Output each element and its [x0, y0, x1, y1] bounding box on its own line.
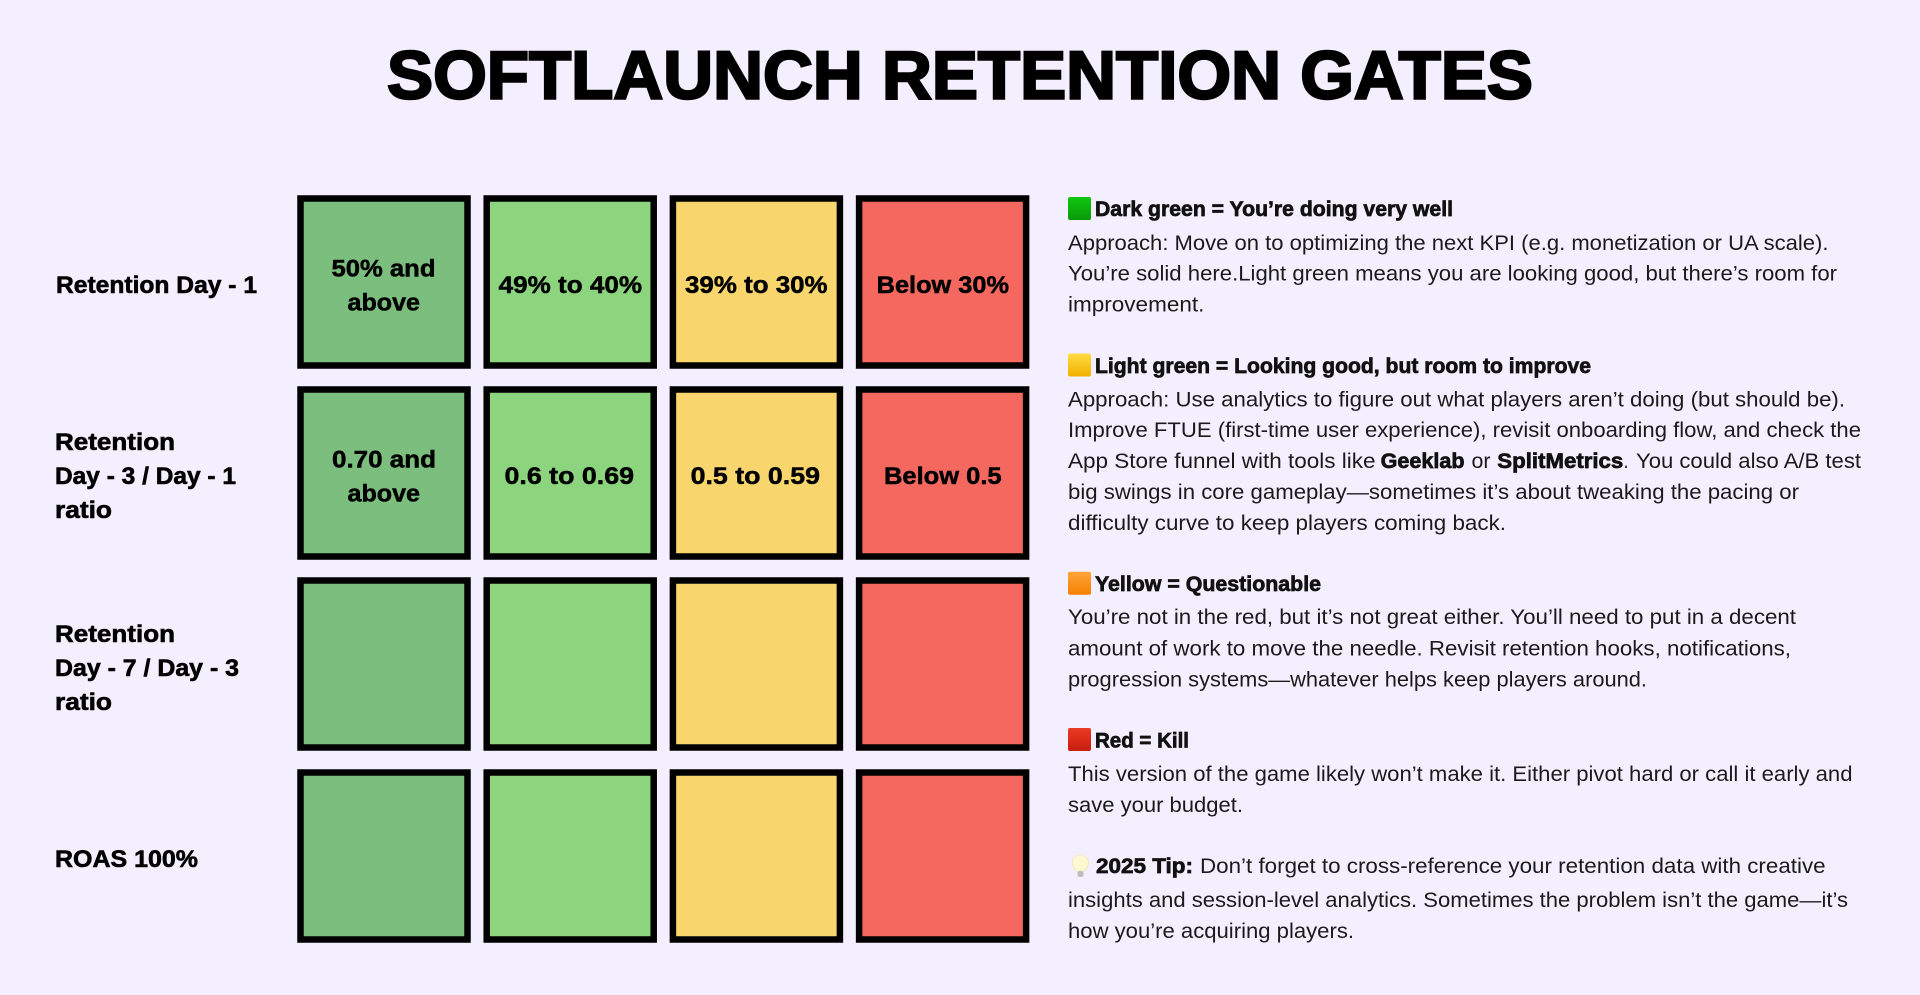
heading: dark green: Dark green = You’re doing very well	[1095, 197, 1453, 221]
row 3 cells	[300, 580, 1026, 748]
heading: light green: Light green = Looking good, but room to improve	[1095, 354, 1591, 378]
text: light green approach: .	[1624, 449, 1628, 473]
text: red description: save your budget.	[1068, 793, 1243, 817]
row 4 cells	[300, 772, 1026, 940]
cell: Below 0.5	[859, 390, 1026, 556]
text: light green approach: Geeklab	[1381, 449, 1465, 473]
text: light green approach: SplitMetrics	[1497, 449, 1623, 473]
cell: 0.70 and above	[300, 390, 468, 556]
retention grid	[55, 198, 1026, 940]
cell: 0.5 to 0.59	[673, 390, 840, 556]
text: tip: insights and session-level analytics. Sometimes the problem isn’t the game—it’s	[1068, 888, 1848, 912]
text: light green approach: or	[1472, 449, 1490, 473]
legend: red	[1068, 728, 1852, 817]
icon: red square	[1068, 728, 1091, 751]
icon: green square	[1068, 197, 1091, 220]
heading: yellow: Yellow = Questionable	[1095, 572, 1321, 596]
cell: 49% to 40%	[487, 198, 654, 366]
text: light green approach: difficulty curve to keep players coming back.	[1068, 511, 1506, 535]
text: yellow description	[1068, 605, 1796, 692]
row label: Day 3 / Day 1 ratio: Day - 3 / Day - 1	[55, 463, 236, 490]
text: dark green approach: You’re solid here.Light green means you are looking good, but there’s room for	[1068, 262, 1837, 286]
text: light green approach: You could also A/B test	[1636, 449, 1861, 473]
row 2 cells	[300, 390, 1026, 556]
cell: Below 30%	[859, 198, 1026, 366]
legend: dark green	[1068, 197, 1837, 317]
row label: Day 7 / Day 3 ratio	[55, 621, 239, 716]
text: dark green approach: Approach: Move on to optimizing the next KPI (e.g. monetization or UA scale).	[1068, 231, 1828, 255]
text: tip	[1068, 854, 1848, 943]
legend: yellow	[1068, 572, 1796, 692]
cell: Below 0.5: Below 0.5	[884, 463, 1002, 490]
text: light green approach: Approach: Use analytics to figure out what players aren’t doing (but should be).	[1068, 388, 1845, 412]
text: dark green approach: improvement.	[1068, 293, 1204, 317]
tip	[1068, 854, 1848, 943]
row 1 cells	[300, 198, 1026, 366]
text: yellow description: progression systems—whatever helps keep players around.	[1068, 668, 1647, 692]
text: light green approach: Improve FTUE (first-time user experience), revisit onboarding flow, and check the	[1068, 418, 1861, 442]
cell: 0.70 and above: 0.70 and	[332, 447, 436, 474]
heading: red: Red = Kill	[1095, 729, 1189, 753]
icon: yellow square	[1068, 354, 1091, 376]
cell: 50% and above	[300, 198, 468, 366]
text: red description: This version of the game likely won’t make it. Either pivot hard or call it early and	[1068, 762, 1852, 786]
row label: Retention Day 1: Retention Day - 1	[56, 272, 257, 299]
text: light green approach: big swings in core gameplay—sometimes it’s about tweaking the pacing or	[1068, 480, 1799, 504]
text: light green approach: App Store funnel with tools like	[1068, 449, 1376, 473]
text: tip: how you’re acquiring players.	[1068, 919, 1354, 943]
icon: orange square	[1068, 572, 1091, 595]
cell: 49% to 40%: 49% to 40%	[499, 272, 642, 299]
text: tip: 2025 Tip:	[1096, 854, 1193, 878]
cell: 39% to 30%	[673, 198, 840, 366]
row label: Day 7 / Day 3 ratio: Retention	[55, 621, 175, 648]
icon: light bulb	[1072, 855, 1088, 877]
cell: Below 30%: Below 30%	[877, 272, 1009, 299]
cell: 0.6 to 0.69	[487, 390, 654, 556]
text: yellow description: You’re not in the red, but it’s not great either. You’ll need to put in a decent	[1068, 605, 1796, 629]
title: SOFTLAUNCH RETENTION GATES	[387, 38, 1533, 114]
text: tip: Don’t forget to cross-reference your retention data with creative	[1200, 854, 1826, 878]
cell: 50% and above: above	[348, 290, 420, 317]
text: yellow description: amount of work to move the needle. Revisit retention hooks, notifications,	[1068, 637, 1791, 661]
cell: 0.5 to 0.59: 0.5 to 0.59	[691, 463, 820, 490]
text: dark green approach	[1068, 231, 1837, 317]
cell: 0.6 to 0.69: 0.6 to 0.69	[504, 463, 634, 490]
row label: Day 7 / Day 3 ratio: ratio	[55, 689, 112, 716]
row label: Day 3 / Day 1 ratio: ratio	[55, 497, 112, 524]
text: red description	[1068, 762, 1852, 817]
row label: Day 3 / Day 1 ratio	[55, 429, 236, 524]
cell: 39% to 30%: 39% to 30%	[685, 272, 828, 299]
legend: light green	[1068, 354, 1861, 535]
row label: Day 7 / Day 3 ratio: Day - 7 / Day - 3	[55, 655, 239, 682]
row label: ROAS 100%: ROAS 100%	[55, 846, 198, 873]
cell: 0.70 and above: above	[348, 481, 420, 508]
text: light green approach	[1068, 388, 1861, 535]
cell: 50% and above: 50% and	[332, 256, 436, 283]
row label: Day 3 / Day 1 ratio: Retention	[55, 429, 175, 456]
